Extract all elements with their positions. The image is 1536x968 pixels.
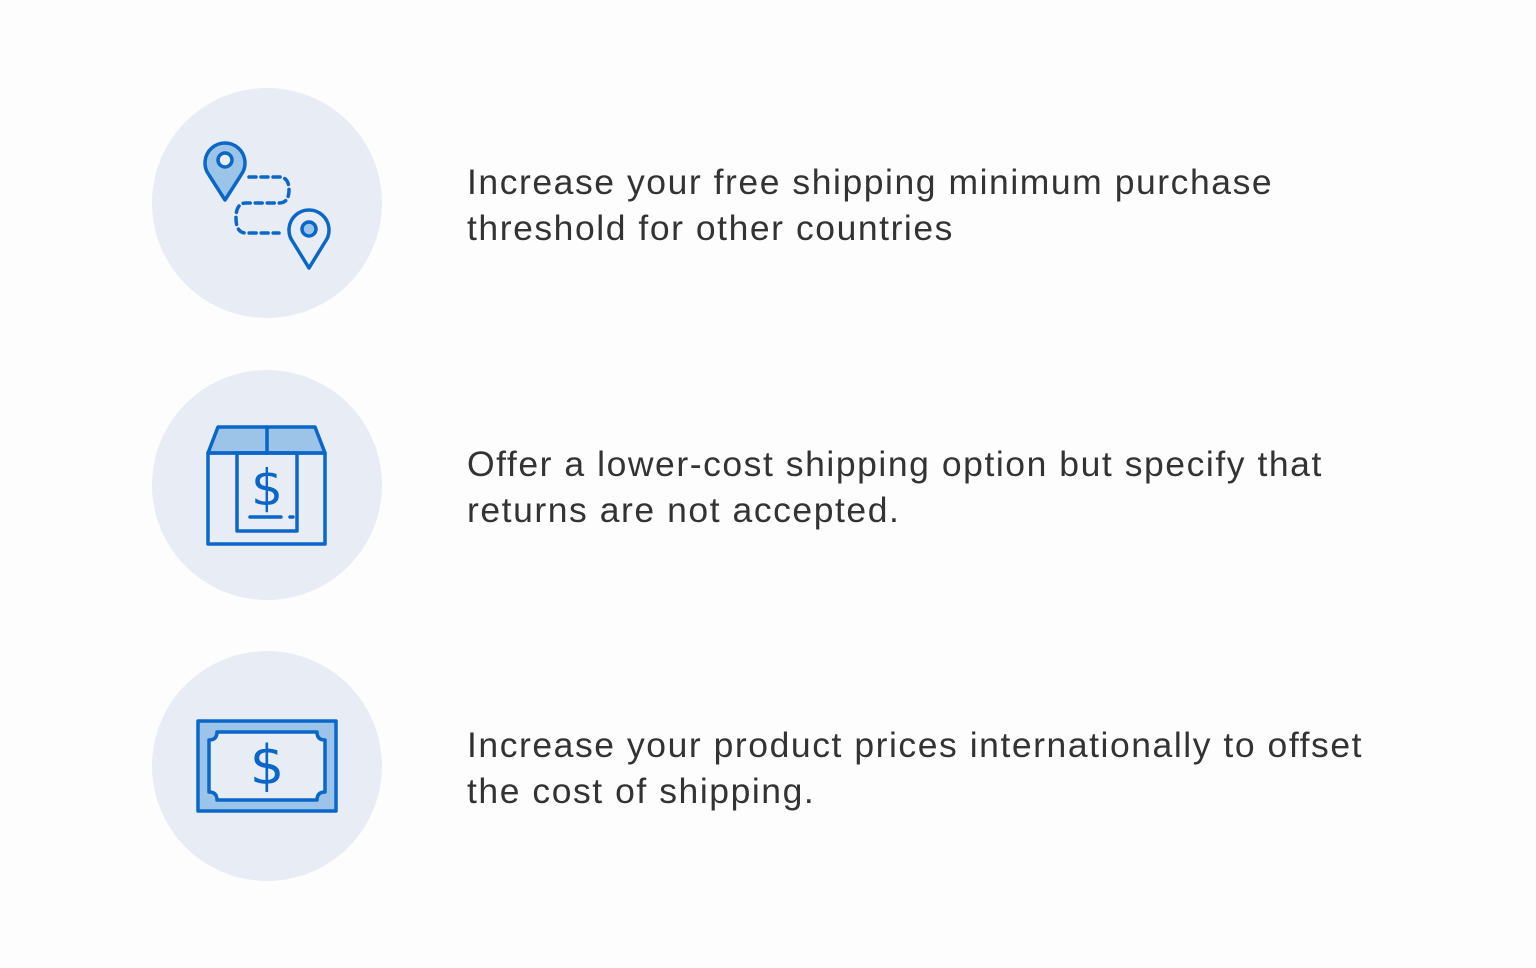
text block 3 xyxy=(467,725,1363,811)
text block 3: the cost of shipping. xyxy=(467,771,815,811)
icon circle 2 xyxy=(152,370,382,600)
icon: box with dollar xyxy=(208,427,325,544)
text block 1: Increase your free shipping minimum purchase xyxy=(467,162,1273,202)
text block 2: Offer a lower-cost shipping option but specify that xyxy=(467,444,1323,484)
text block 2 xyxy=(467,444,1323,530)
text block 3: Increase your product prices internationally to offset xyxy=(467,725,1363,765)
text block 1: threshold for other countries xyxy=(467,208,954,248)
icon circle 3 xyxy=(152,651,382,881)
icon circle 1 xyxy=(152,88,382,318)
text block 2: returns are not accepted. xyxy=(467,490,900,530)
icon: banknote: $ xyxy=(250,734,284,797)
icon: banknote xyxy=(198,721,336,811)
icon: map pins route xyxy=(205,143,329,268)
text block 1 xyxy=(467,162,1273,248)
icon: box with dollar: $ xyxy=(251,459,283,517)
